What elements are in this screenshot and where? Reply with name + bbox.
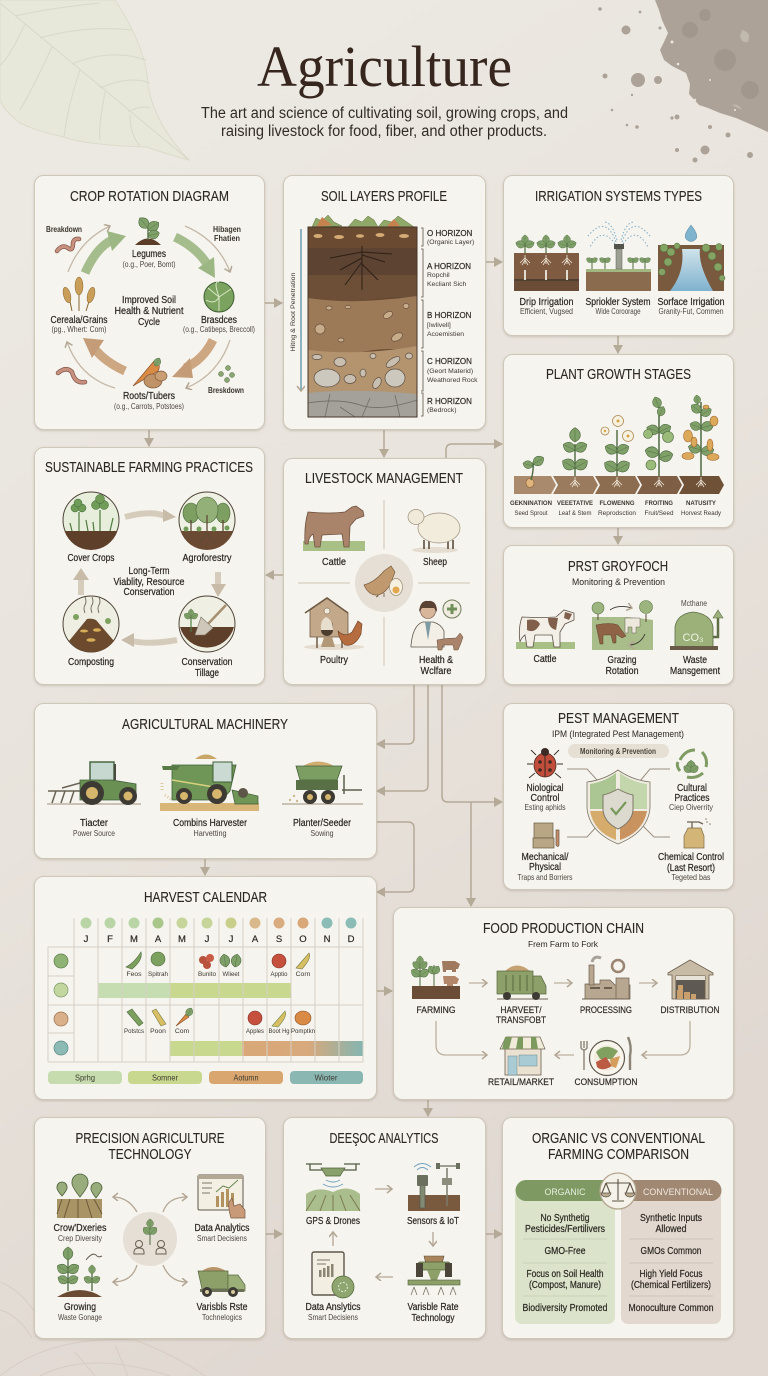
month labels: J: [84, 934, 89, 945]
label: tractor: Power Source: [73, 829, 115, 838]
label: cereals: Cereala/Grains: [50, 315, 108, 326]
month labels: [84, 934, 355, 945]
icon: sheep: [408, 510, 460, 553]
label: roots: (o.g., Carrots, Potstoes): [114, 402, 184, 411]
arrows: practice cycle: [73, 509, 226, 647]
labels: cycle notes: Breskdown: [208, 386, 244, 395]
panel: irrigation systems: [504, 176, 734, 336]
label: legumes: [122, 249, 176, 269]
label: farming: FARMING: [416, 1005, 456, 1016]
label: mechanical: [518, 852, 572, 882]
labels: soil horizons: Acoemistien: [427, 331, 464, 338]
panel: sustainable farming practices: [34, 448, 264, 684]
icon: cover crops: [63, 492, 119, 550]
label: planter: Sowing: [310, 829, 334, 838]
labels: soil horizons: Kecliant Sich: [427, 281, 467, 288]
chart: calendar grid: [48, 918, 363, 1062]
center hub icon: [123, 1212, 177, 1266]
legend: Sprhg: [75, 1074, 95, 1082]
icon: maturity: [682, 394, 719, 487]
heading: sustainable: SUSTAINABLE FARMING PRACTICES: [45, 460, 253, 476]
heading: crop rotation: CROP ROTATION DIAGRAM: [70, 189, 229, 205]
month icons: [80, 918, 356, 928]
icon: sensors: [408, 1163, 460, 1211]
decoration: soil top right: [598, 0, 768, 162]
labels: soil horizons: A HORIZON: [427, 262, 471, 271]
icon: fruiting: [644, 396, 674, 487]
column: conventional: GMOs Common: [640, 1246, 702, 1257]
label: crop diversity: Crep Diversity: [58, 1234, 102, 1243]
heading: precision: TECHNOLOGY: [108, 1147, 192, 1163]
panel: agricultural machinery: [34, 704, 376, 858]
label: chemical: [658, 852, 724, 882]
month labels: A: [155, 934, 162, 945]
icon: dairy cow: [516, 610, 575, 649]
column: conventional: High Yield Focus: [640, 1269, 702, 1280]
labels: soil horizons: Ropchil: [427, 272, 450, 279]
panel: precision agriculture: [34, 1118, 266, 1338]
labels: irrigation: Wide Coroorage: [596, 307, 641, 316]
month labels: F: [107, 934, 113, 945]
heading: soil layers: SOIL LAYERS PROFILE: [321, 189, 447, 205]
label: variable rate: Varisbls Rste: [196, 1302, 248, 1313]
icon: biodigester: CO₃: [683, 632, 703, 644]
center text: Long-Term: [128, 566, 170, 577]
label: cultural: [669, 783, 713, 812]
label: health: Wclfare: [420, 666, 452, 677]
center text: Conservation: [124, 587, 174, 598]
icon: growing plants: [55, 1247, 102, 1297]
legend: [48, 1071, 363, 1084]
labels: cycle notes: Breakdown: [46, 225, 82, 234]
icon: cabbage: [204, 282, 234, 312]
heading: plant growth: PLANT GROWTH STAGES: [546, 367, 691, 383]
icon: coop: [304, 598, 364, 650]
month labels: M: [130, 934, 138, 945]
crop labels row 2: Potstcs: [124, 1028, 145, 1035]
center text: [114, 566, 185, 598]
icon: grazing rotation: [592, 600, 653, 650]
labels: growth stages: Horvest Ready: [681, 510, 722, 517]
label: data analytics: Data Anslytics: [306, 1302, 360, 1313]
label: roots: Roots/Tubers: [123, 391, 175, 402]
label: brassicas: [183, 315, 255, 334]
icon: combine harvester: [160, 754, 259, 811]
heading: PRST GROYFOCH: [568, 559, 668, 575]
labels: soil horizons: (Geort Materid): [427, 368, 473, 375]
labels: practices: [68, 553, 232, 679]
labels: practices: Tillage: [195, 668, 219, 679]
icon: wheat: [62, 277, 96, 311]
labels: irrigation: [520, 297, 724, 316]
panel: organic vs conventional: [502, 1118, 734, 1338]
panel: food production chain: [394, 908, 734, 1100]
hub arrows: [113, 1197, 187, 1282]
label: biological: Control: [530, 793, 560, 804]
label: grazing: Rotation: [606, 666, 638, 677]
center text: Improved Soil: [122, 295, 176, 306]
label: cultural: Cultural: [677, 783, 707, 794]
icon: germination: [522, 454, 546, 488]
chain arrows: [436, 983, 690, 1055]
labels: irrigation: Efficient, Vugsed: [520, 307, 573, 316]
icon: variable rate machine: [408, 1256, 460, 1295]
panel: plant growth stages: [504, 354, 734, 528]
column: organic: (Compost, Manure): [529, 1280, 601, 1291]
labels: growth stages: GEKNINATION: [510, 500, 552, 507]
icon: shield: [587, 770, 650, 844]
heading: comparison: [532, 1131, 705, 1163]
icon: flowering: [601, 416, 634, 487]
crop labels row 2: [124, 1028, 315, 1035]
icon: worms and peas: [57, 239, 234, 382]
panel: livestock management: [284, 458, 486, 684]
labels: growth stages: NATUSITY: [686, 500, 716, 507]
icon: balance scale: [600, 1173, 636, 1209]
decoration: leaf top left: [0, 0, 189, 160]
crop labels row 2: Poon: [150, 1028, 166, 1035]
crop icons row 2: [127, 1006, 311, 1027]
column: conventional: CONVENTIONAL: [643, 1187, 713, 1198]
label: combine: Combins Harvester: [173, 818, 248, 829]
month labels: J: [205, 934, 210, 945]
icon: vegetative: [560, 428, 590, 487]
icon: trap: [533, 823, 559, 848]
crop labels row 2: Com: [175, 1028, 190, 1035]
label: growing: [58, 1302, 102, 1322]
label: waste: Waste: [683, 655, 707, 666]
labels: cycle notes: [46, 225, 244, 395]
label: harvest transport: [496, 1005, 546, 1026]
subheading: food chain: Frem Farm to Fork: [528, 939, 599, 949]
label: gps drones: GPS & Drones: [306, 1216, 360, 1227]
labels: growth stages: [510, 500, 722, 517]
month labels: N: [324, 934, 331, 945]
label: biological: [524, 783, 566, 812]
icon: dump truck: [198, 1267, 245, 1297]
label: data analytics: [194, 1223, 250, 1243]
labels: soil horizons: Weathored Rock: [427, 377, 478, 384]
center text: [114, 295, 184, 328]
label: mechanical: Physical: [529, 862, 561, 873]
label: harvest transport: HARVEET/: [500, 1005, 542, 1016]
dividers: [298, 500, 470, 666]
panel: decision analytics: [284, 1118, 486, 1338]
crop labels row 1: Spitrah: [148, 971, 168, 978]
chart: growth soil chevrons: [514, 476, 724, 494]
label: data analytics: Smart Decisiens: [308, 1313, 358, 1322]
icon: cattle: [303, 506, 365, 551]
subtitle: raising livestock for food, fiber, and other products.: [221, 123, 547, 140]
crop labels row 1: Feos: [126, 971, 142, 978]
icon: root vegetables: [133, 356, 167, 388]
icon: planter: [282, 762, 363, 804]
brackets: [421, 228, 423, 416]
label: data analytics: Data Analytics: [194, 1223, 250, 1234]
crop labels row 1: Apptio: [270, 971, 288, 978]
icon: factory: [582, 957, 630, 999]
subtitle: The art and science of cultivating soil, growing crops, and: [201, 105, 568, 122]
heading: livestock: LIVESTOCK MANAGEMENT: [305, 471, 463, 487]
crop labels row 1: Bunito: [198, 971, 216, 978]
label: distribution: DISTRIBUTION: [660, 1005, 720, 1016]
panel: harvest calendar: [34, 876, 376, 1100]
title: Agriculture: [257, 34, 512, 99]
label: poultry: Poultry: [320, 655, 348, 666]
column: organic: [515, 1180, 618, 1324]
heading: harvest: HARVEST CALENDAR: [144, 890, 267, 906]
icon: cultural cycle: [677, 750, 706, 778]
heading: irrigation: IRRIGATION SYSTEMS TYPES: [535, 189, 702, 205]
column: organic: No Synthetig: [540, 1213, 590, 1224]
heading: precision: [76, 1131, 225, 1163]
heading: comparison: FARMING COMPARISON: [548, 1147, 689, 1163]
column: conventional: Synthetic Inputs: [640, 1213, 702, 1224]
label: variable rate technology: Technology: [412, 1313, 454, 1324]
pill: monitoring: Monitoring & Prevention: [580, 747, 656, 756]
column: conventional: Monoculture Common: [628, 1303, 714, 1314]
label: chemical: Tegeted bas: [672, 873, 710, 882]
label: cattle: Cattle: [322, 557, 346, 568]
connectors between panels: [149, 262, 618, 1234]
icon: ladybug: [527, 748, 563, 778]
label: chemical: (Last Resort): [667, 863, 715, 874]
heading: pest: PEST MANAGEMENT: [558, 711, 679, 727]
label: cattle: Cattle: [534, 654, 557, 665]
crop labels row 1: Wlieet: [222, 971, 240, 978]
label: mechanical: Mechanical/: [522, 852, 569, 863]
labels: practices: Composting: [68, 657, 114, 668]
label: data analytics: Smart Decisiens: [197, 1234, 247, 1243]
labels: soil horizons: (Organic Layer): [427, 239, 474, 246]
labels: cycle notes: Hibagen: [213, 225, 241, 234]
label: health: [419, 655, 453, 677]
label: combine: [173, 818, 248, 838]
season row icons: [54, 954, 68, 1055]
labels: growth stages: Leaf & Stem: [558, 510, 592, 517]
flow arrows: [333, 1189, 433, 1277]
labels: growth stages: Reprodsction: [598, 510, 636, 517]
icon: conservation tillage: [179, 596, 235, 652]
icon: drone over field: [306, 1164, 360, 1211]
label: processing: PROCESSING: [580, 1005, 632, 1016]
label: variable rate: [196, 1302, 248, 1322]
label: crop diversity: [54, 1223, 106, 1243]
labels: soil horizons: B HORIZON: [427, 311, 472, 320]
label: brassicas: Brasdces: [201, 315, 237, 326]
labels: practices: Cover Crops: [68, 553, 114, 564]
label: variable rate technology: Varisble Rate: [408, 1302, 459, 1313]
icon: composting: [63, 596, 119, 652]
labels: practices: Agroforestry: [182, 553, 232, 564]
crop labels row 2: Apples: [246, 1028, 265, 1035]
chart: calendar bars: [98, 983, 363, 1056]
labels: soil horizons: [Iwlivell]: [427, 322, 451, 329]
labels: irrigation: Drip Irrigation: [520, 297, 574, 308]
decoration: leaf bottom left: [0, 1282, 205, 1376]
subheading: Monitoring & Prevention: [572, 577, 665, 588]
column: conventional: Allowed: [656, 1224, 686, 1235]
legend: Wioter: [314, 1074, 338, 1082]
labels: growth stages: VEEETATIVE: [557, 500, 593, 507]
labels: growth stages: Fruit/Seed: [644, 510, 674, 517]
legend: Aotumn: [234, 1074, 258, 1082]
label: mechanical: Traps and Borriers: [518, 873, 572, 882]
crop labels row 2: Pomptkn: [291, 1028, 315, 1035]
month labels: M: [178, 934, 186, 945]
label: legumes: (o.g., Poer, Bomt): [122, 260, 176, 269]
month labels: S: [276, 934, 282, 945]
label: cereals: [50, 315, 108, 334]
month labels: J: [229, 934, 234, 945]
label: grazing: [606, 655, 638, 677]
icon: agroforestry: [179, 492, 235, 550]
label: biological: Esting aphids: [524, 803, 566, 812]
icon: legume seedling: [135, 215, 161, 245]
month labels: O: [299, 934, 307, 945]
icon: sprinkler: [585, 222, 652, 291]
connector lines: [567, 769, 670, 837]
icon: biodigester: Mcthane: [681, 599, 707, 608]
icon: hen and egg: [355, 554, 413, 612]
crop icons row 1: [126, 952, 310, 969]
center text: Viablity, Resource: [114, 577, 185, 588]
icon: map pins on field: [57, 1174, 102, 1218]
arrow: depth: [300, 229, 302, 391]
crop labels row 1: [126, 971, 311, 978]
label: cultural: Ciep Oiverrity: [669, 803, 713, 812]
pill: monitoring: [568, 744, 669, 758]
icon: plate and cutlery: [581, 1037, 631, 1076]
legend: Somner: [152, 1074, 178, 1082]
column: organic: ORGANIC: [544, 1187, 586, 1198]
label: cultural: Practices: [674, 793, 710, 804]
labels: growth stages: Seed Sprout: [514, 510, 548, 517]
month labels: A: [252, 934, 259, 945]
column: organic: Biodiversity Promoted: [522, 1303, 608, 1314]
label: planter: [293, 818, 352, 838]
subheading: pest: IPM (Integrated Pest Management): [552, 729, 684, 740]
label: growing: Waste Gonage: [58, 1313, 102, 1322]
subtitle: [201, 105, 568, 140]
label: crop diversity: Crow'Dxeries: [54, 1223, 106, 1234]
icon: biodigester: [670, 599, 723, 650]
label: consumption: CONSUMPTION: [574, 1077, 638, 1088]
crop labels row 2: Boot Hg: [268, 1028, 290, 1035]
label: retail: RETAIL/MARKET: [488, 1077, 554, 1088]
label: sheep: Sheep: [423, 557, 447, 568]
label: waste: [670, 655, 720, 677]
label: harvest transport: TRANSFOBT: [496, 1015, 546, 1026]
label: tractor: Tiacter: [80, 818, 109, 829]
heading: machinery: AGRICULTURAL MACHINERY: [122, 717, 288, 733]
label: growing: Growing: [64, 1302, 96, 1313]
label: chemical: Chemical Control: [658, 852, 724, 863]
column: organic: Focus on Soil Health: [526, 1269, 604, 1280]
labels: cycle notes: Fhatien: [214, 234, 240, 243]
panel: crop rotation diagram: [34, 176, 264, 430]
label: brassicas: (o.g., Catibeps, Breccoll): [183, 325, 255, 334]
icon: warehouse: [668, 960, 713, 999]
center text: Health & Nutrient: [114, 306, 184, 317]
labels: irrigation: Sorface Irrigation: [658, 297, 724, 308]
panel: prst groyfoch: [504, 546, 734, 684]
label: cereals: (pg., Whert: Com): [52, 325, 107, 334]
label: data analytics: [306, 1302, 360, 1322]
icon: spray bottle: [684, 818, 711, 848]
label: health: Health &: [419, 655, 453, 666]
heading: precision: PRECISION AGRICULTURE: [76, 1131, 225, 1147]
labels: irrigation: Spriokler System: [586, 297, 650, 308]
heading: comparison: ORGANIC VS CONVENTIONAL: [532, 1131, 705, 1147]
column: organic: Pesticides/Fertilivers: [525, 1224, 605, 1235]
label: roots: [114, 391, 184, 411]
labels: soil horizons: (Bedrock): [427, 407, 456, 414]
icon: surface irrigation: [658, 225, 725, 291]
label: depth axis: Hitng & Root Penetration: [290, 272, 297, 352]
labels: soil horizons: [427, 229, 478, 414]
label: variable rate: Tochnelogics: [202, 1313, 242, 1322]
heading: food chain: FOOD PRODUCTION CHAIN: [483, 921, 644, 937]
label: grazing: Grazing: [608, 655, 636, 666]
icon: tablet: [312, 1252, 354, 1298]
labels: irrigation: Granity-Fut, Commen: [658, 307, 724, 316]
thin cycle arrows: [67, 226, 230, 388]
icon: farming: [409, 956, 460, 999]
label: legumes: Legumes: [132, 249, 166, 260]
label: waste: Mansgement: [670, 666, 720, 677]
icon: truck: [497, 966, 548, 1000]
column: organic: GMO-Free: [544, 1246, 586, 1257]
icon: market stall: [500, 1037, 545, 1075]
icon: tractor: [47, 762, 141, 805]
icon: vet with calf: [411, 600, 463, 650]
icon: analytics screen: [198, 1175, 245, 1218]
icon: drip irrigation: [514, 235, 579, 291]
column: conventional: (Chemical Fertilizers): [631, 1280, 711, 1291]
label: planter: Planter/Seeder: [293, 818, 352, 829]
center text: Cycle: [138, 317, 160, 328]
labels: soil horizons: O HORIZON: [427, 229, 473, 238]
thick cycle arrows: [83, 231, 215, 378]
column: conventional: [618, 1180, 722, 1324]
label: variable rate technology: [408, 1302, 459, 1324]
label: tractor: [73, 818, 115, 838]
month labels: D: [348, 934, 355, 945]
label: sensors: Sensors & IoT: [407, 1216, 459, 1227]
labels: practices: Conservation: [182, 657, 232, 668]
panel: soil layers profile: [284, 176, 486, 430]
label: combine: Harvetting: [194, 829, 226, 838]
labels: growth stages: FROITING: [645, 500, 673, 507]
heading: decision: DEEŞOC ANALYTICS: [330, 1131, 438, 1147]
crop labels row 1: Corn: [296, 971, 311, 978]
labels: soil horizons: R HORIZON: [427, 397, 472, 406]
label: biological: Niological: [526, 783, 564, 794]
panel: pest management: [504, 704, 734, 890]
labels: soil horizons: C HORIZON: [427, 357, 472, 366]
labels: growth stages: FLOWENNG: [600, 500, 634, 507]
chart: soil profile: [308, 215, 417, 417]
